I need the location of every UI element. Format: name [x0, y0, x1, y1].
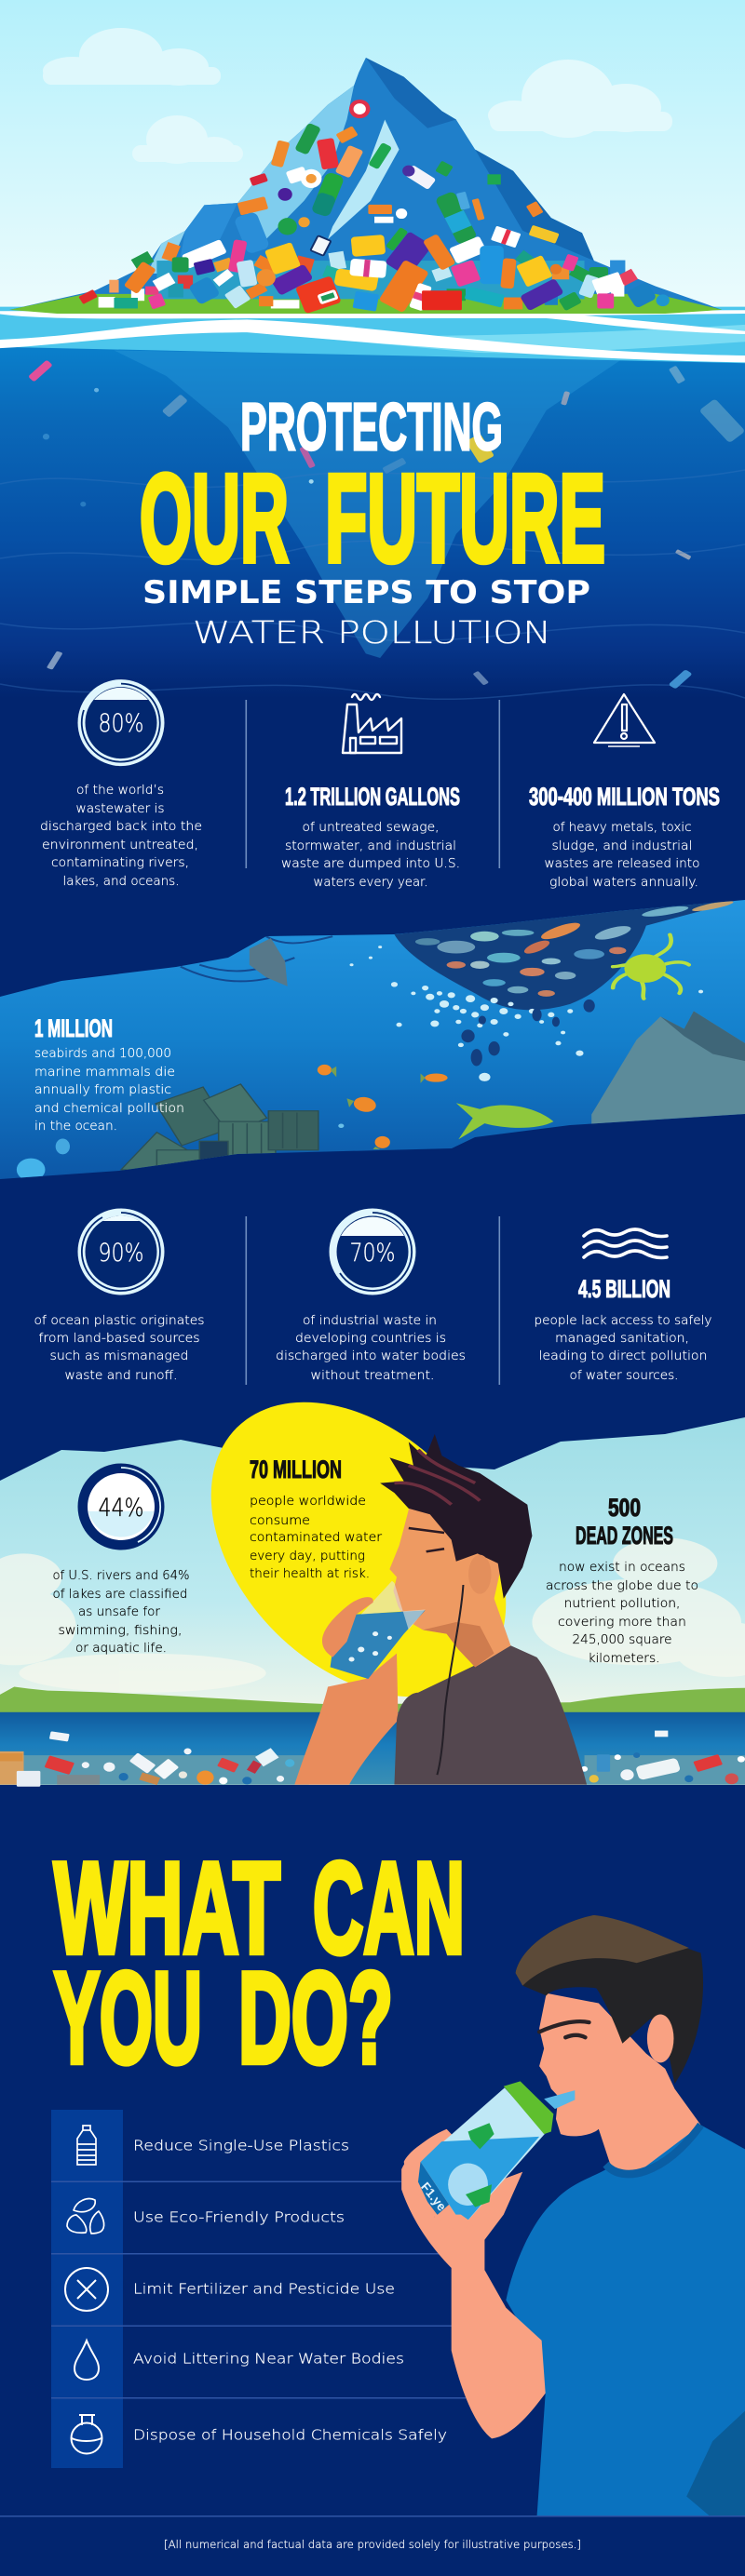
stat 80 text: discharged back into the — [40, 819, 202, 834]
brow and eye — [409, 1528, 444, 1551]
stat: 44 percent — [52, 1463, 190, 1656]
description: marine mammals die — [34, 1065, 175, 1080]
heading: what can you do: WHAT — [54, 1836, 280, 1980]
description: without treatment. — [311, 1368, 434, 1383]
heading: 1.2 TRILLION GALLONS — [285, 783, 460, 811]
description: seabirds and 100,000 — [34, 1046, 171, 1061]
description — [535, 1313, 712, 1383]
description: stormwater, and industrial — [285, 839, 456, 853]
progress ring 70 — [330, 1208, 415, 1295]
plastic bottles on mountain — [78, 100, 670, 314]
earphone wire — [437, 1585, 463, 1775]
neck and face — [539, 1993, 701, 2177]
neck and face — [389, 1496, 510, 1667]
description: contaminated water — [250, 1530, 382, 1545]
heading: what can you do — [54, 1836, 465, 2090]
description: as unsafe for — [78, 1604, 160, 1619]
icon: waves — [584, 1229, 667, 1258]
description: their health at risk. — [250, 1566, 370, 1581]
stat: 70 percent — [276, 1208, 466, 1383]
progress ring 44 — [78, 1463, 164, 1550]
glass of polluted water — [331, 1610, 426, 1679]
description: nutrient pollution, — [564, 1596, 680, 1611]
seabed bubbles — [56, 1139, 70, 1154]
green fish — [456, 1103, 553, 1139]
description: of water sources. — [570, 1368, 678, 1383]
action text — [133, 2137, 447, 2444]
stat: 4.5 billion — [535, 1229, 712, 1383]
bottle: F1.ye — [418, 2180, 449, 2214]
description: developing countries is — [295, 1331, 446, 1346]
progress ring 80 — [78, 679, 164, 766]
hair — [516, 1915, 703, 2084]
stat 80 text: contaminating rivers, — [51, 855, 189, 870]
description: or aquatic life. — [75, 1641, 167, 1656]
fingers — [322, 1597, 373, 1657]
heading number: 500 — [608, 1494, 641, 1522]
shoreline grass — [0, 1686, 745, 1714]
stat: 1 million — [34, 1014, 184, 1134]
hair highlight — [516, 1915, 689, 1986]
stat 80 text: environment untreated, — [42, 838, 198, 852]
hero illustration: plastic iceberg — [0, 0, 745, 699]
description: of ocean plastic originates — [34, 1313, 205, 1328]
action text: Use Eco-Friendly Products — [133, 2209, 345, 2226]
stat: 90 percent — [34, 1208, 205, 1383]
action text: Reduce Single-Use Plastics — [133, 2137, 349, 2153]
cloud right — [488, 60, 672, 138]
surface ripples — [181, 936, 332, 981]
hand — [401, 2129, 522, 2273]
stat: 90 percent: 90% — [99, 1239, 143, 1268]
foam and surface — [0, 307, 745, 363]
description — [544, 820, 700, 890]
stat: 80 percent — [40, 679, 202, 889]
stat 80 text: wastewater is — [76, 801, 164, 816]
icon column — [51, 2110, 123, 2468]
icon: water drop — [74, 2341, 99, 2380]
heading: 70 MILLION — [250, 1456, 342, 1483]
description: 245,000 square — [572, 1632, 672, 1647]
eyebrow and eye — [539, 2021, 589, 2037]
heading label: DEAD ZONES — [576, 1522, 673, 1550]
action list — [51, 2110, 466, 2468]
ocean pollution illustration band — [0, 893, 745, 1182]
stat: 300-400 million tons — [529, 694, 720, 890]
subtitle light: WATER POLLUTION — [193, 614, 551, 651]
description: people worldwide — [250, 1494, 366, 1509]
stat: 500 dead zones — [546, 1494, 698, 1666]
cloud left — [43, 28, 221, 86]
description: people lack access to safely — [535, 1313, 712, 1328]
description: leading to direct pollution — [538, 1348, 708, 1363]
divider — [246, 1216, 247, 1385]
stat 80 text — [40, 783, 202, 889]
description: global waters annually. — [549, 875, 698, 890]
shirt shadow — [686, 2411, 745, 2516]
title line: our future: OUR — [140, 449, 289, 588]
row separators — [51, 2181, 466, 2399]
stat 80 text: of the world’s — [76, 783, 164, 798]
forearm and upper arm — [452, 2267, 546, 2438]
divider — [246, 700, 247, 868]
description: of lakes are classified — [52, 1587, 188, 1602]
divider — [499, 1216, 500, 1385]
title line: protecting: PROTECTING — [240, 391, 503, 465]
sky — [0, 0, 745, 321]
description: in the ocean. — [34, 1119, 117, 1134]
icon: crossed circle — [65, 2268, 108, 2311]
bottle — [418, 2081, 575, 2226]
divider — [499, 700, 500, 868]
water waves near bottom of hero — [0, 470, 745, 699]
heading: 1 MILLION — [34, 1014, 113, 1042]
icon: bottle — [77, 2126, 96, 2165]
cloud small — [132, 115, 243, 164]
description: waters every year. — [313, 875, 428, 890]
octopus body — [624, 954, 666, 983]
debris near stats — [47, 651, 693, 690]
icon: flask — [71, 2415, 102, 2453]
action text: Limit Fertilizer and Pesticide Use — [133, 2280, 395, 2297]
description: discharged into water bodies — [276, 1348, 466, 1363]
description: every day, putting — [250, 1549, 365, 1563]
description: sludge, and industrial — [551, 839, 693, 853]
hair — [380, 1434, 532, 1599]
lake water — [0, 1712, 745, 1785]
description — [52, 1568, 190, 1656]
plastic waste on shore — [0, 1731, 745, 1787]
progress ring 90 — [78, 1208, 164, 1295]
heading: what can you do: CAN — [313, 1836, 465, 1980]
description: of untreated sewage, — [302, 820, 440, 835]
icon: factory — [343, 694, 401, 753]
icon: warning — [594, 694, 655, 746]
action text: Avoid Littering Near Water Bodies — [133, 2351, 404, 2368]
description: covering more than — [558, 1615, 686, 1630]
microplastic bubbles — [338, 946, 703, 1128]
big rock right — [591, 1012, 745, 1125]
orange fish — [318, 1065, 448, 1149]
mountain — [9, 58, 723, 314]
title line: our future — [140, 449, 605, 588]
description: across the globe due to — [546, 1578, 698, 1593]
wood stack — [121, 1084, 318, 1172]
heading: what can you do: YOU — [54, 1946, 202, 2090]
description — [34, 1046, 184, 1134]
description: waste and runoff. — [65, 1368, 177, 1383]
stat 80 text: lakes, and oceans. — [63, 874, 179, 889]
stat: 80 percent: 80% — [99, 709, 143, 738]
man with contaminated water — [294, 1434, 587, 1785]
description — [34, 1313, 205, 1383]
shoreline clouds — [0, 1537, 745, 1693]
collar — [606, 2125, 701, 2174]
floating debris underwater — [28, 359, 745, 668]
heading: what can you do: DO? — [238, 1946, 393, 2090]
yellow sun shape — [154, 1345, 563, 1754]
description: of industrial waste in — [303, 1313, 437, 1328]
description: wastes are released into — [544, 856, 700, 871]
fingers — [404, 2131, 475, 2230]
action text: Dispose of Household Chemicals Safely — [133, 2427, 447, 2444]
description — [276, 1313, 466, 1383]
stat: 70 million — [250, 1456, 382, 1581]
description: kilometers. — [589, 1651, 659, 1666]
description — [546, 1560, 698, 1666]
man drinking from reusable bottle — [401, 1915, 745, 2516]
t-shirt — [394, 1645, 587, 1785]
octopus — [613, 934, 689, 999]
description: and chemical pollution — [34, 1101, 184, 1116]
sea below waterline — [0, 344, 745, 698]
description: of U.S. rivers and 64% — [52, 1568, 190, 1583]
icon: recycling leaves — [67, 2199, 104, 2234]
description: managed sanitation, — [555, 1331, 689, 1346]
footer note: [All numerical and factual data are provided solely for illustrative purposes.] — [164, 2538, 581, 2551]
description: such as mismanaged — [50, 1348, 188, 1363]
t-shirt — [506, 2125, 745, 2516]
description: annually from plastic — [34, 1082, 171, 1097]
ear — [647, 2014, 673, 2062]
description — [281, 820, 460, 890]
description: swimming, fishing, — [58, 1623, 183, 1638]
description: waste are dumped into U.S. — [281, 856, 460, 871]
scene: polluted shoreline — [0, 1345, 745, 1787]
description: consume — [250, 1513, 310, 1528]
arm — [294, 1654, 399, 1785]
submerged iceberg — [114, 350, 622, 658]
description — [250, 1494, 382, 1581]
dense filler behind the lower pile — [131, 242, 638, 309]
garbage patch — [394, 897, 745, 1010]
description: of heavy metals, toxic — [553, 820, 691, 835]
title — [140, 391, 605, 651]
description: from land-based sources — [39, 1331, 199, 1346]
heading: 4.5 BILLION — [578, 1275, 670, 1303]
subtitle bold: SIMPLE STEPS TO STOP — [142, 574, 590, 611]
stat: 1.2 trillion gallons — [281, 694, 460, 890]
stat: 70 percent: 70% — [350, 1239, 395, 1268]
ear — [468, 1555, 492, 1594]
stat: 44 percent: 44% — [99, 1494, 143, 1523]
floating rock — [250, 938, 288, 986]
sky band — [0, 1417, 745, 1785]
description: now exist in oceans — [559, 1560, 685, 1575]
